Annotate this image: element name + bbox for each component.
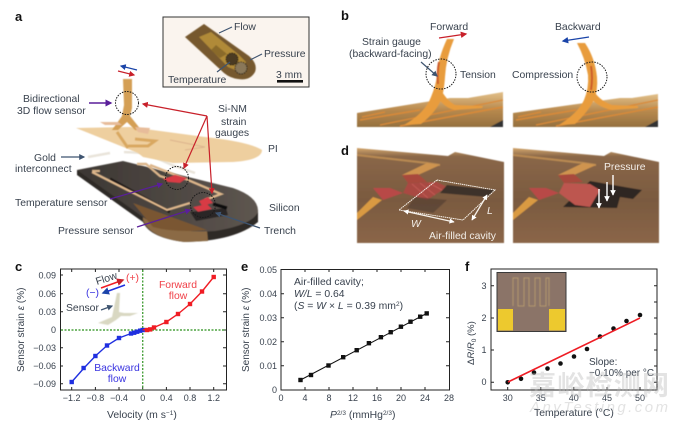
axes frame and ticks bbox=[281, 269, 450, 390]
backward label and arrow bbox=[555, 22, 601, 41]
pressure label and arrows: Pressure bbox=[604, 162, 646, 173]
strain gauge label bbox=[349, 37, 437, 76]
x tick labels: 40 bbox=[569, 393, 579, 403]
backward photo bbox=[513, 43, 658, 127]
panel label e: e bbox=[241, 259, 248, 274]
watermark: AnyTesting.com bbox=[529, 399, 668, 416]
label: silicon: Silicon bbox=[269, 203, 300, 214]
x tick labels: 0 bbox=[278, 393, 284, 403]
y tick labels: 0 bbox=[51, 325, 56, 335]
label: Si-NM strain gauges: Si-NM bbox=[218, 104, 247, 115]
y tick labels: 0.02 bbox=[259, 337, 277, 347]
silicon base bbox=[77, 161, 258, 242]
dashed circles bbox=[116, 92, 216, 218]
label: temperature sensor bbox=[15, 184, 162, 209]
label: pressure sensor bbox=[58, 210, 190, 237]
x tick labels: 12 bbox=[348, 393, 358, 403]
y tick labels: 0.04 bbox=[259, 289, 277, 299]
inset labels: Flow bbox=[234, 22, 256, 33]
faint gold layer bbox=[88, 152, 195, 173]
W L cavity labels bbox=[411, 206, 497, 242]
y tick labels: 0.03 bbox=[38, 307, 56, 317]
pink strain gauges bbox=[163, 175, 213, 212]
axis titles: 2/3 bbox=[383, 410, 392, 417]
label: trench bbox=[216, 213, 296, 237]
label: Si-NM strain gauges: gauges bbox=[215, 128, 249, 139]
inset labels bbox=[168, 22, 306, 86]
x tick labels bbox=[278, 393, 454, 403]
y tick labels bbox=[259, 265, 277, 395]
pressure label and arrows bbox=[599, 162, 646, 208]
axis titles bbox=[241, 288, 395, 421]
black data points bbox=[505, 313, 642, 385]
x tick labels: 4 bbox=[302, 393, 308, 403]
axis titles bbox=[16, 288, 177, 421]
x tick labels: −0.8 bbox=[87, 393, 104, 403]
y tick labels: −0.09 bbox=[33, 379, 56, 389]
backward label and arrow: Backward bbox=[555, 22, 601, 33]
annotation text: (S = W × L = 0.39 mm bbox=[294, 301, 396, 312]
backward flow label: Backward bbox=[94, 363, 140, 374]
x tick labels: 30 bbox=[503, 393, 513, 403]
x tick labels: 1.2 bbox=[207, 393, 220, 403]
label: PI: PI bbox=[268, 144, 278, 155]
forward flow label: Forward bbox=[159, 280, 197, 291]
x tick labels bbox=[63, 393, 220, 403]
panel: b forward and backward bending bbox=[341, 8, 658, 127]
axis titles: 2/3 bbox=[337, 410, 346, 417]
x tick labels: 16 bbox=[372, 393, 382, 403]
annotation text: W/L = 0.64 bbox=[294, 289, 345, 300]
forward label and arrow: Forward bbox=[430, 22, 468, 33]
x tick labels: 28 bbox=[444, 393, 454, 403]
label: gold interconnect: Gold bbox=[34, 153, 56, 164]
flow legend inset: Flow bbox=[95, 270, 119, 288]
y tick labels bbox=[481, 281, 487, 387]
x tick labels bbox=[503, 393, 645, 403]
device photo bbox=[185, 24, 256, 79]
label: temperature sensor: Temperature sensor bbox=[15, 198, 108, 209]
annotation text: Air-filled cavity; bbox=[294, 277, 364, 288]
PI layer bbox=[76, 127, 262, 163]
tension circle and label bbox=[426, 59, 496, 89]
y tick labels: −0.06 bbox=[33, 361, 56, 371]
black data series bbox=[298, 311, 429, 382]
x tick labels: 0.8 bbox=[184, 393, 196, 403]
x tick labels: 35 bbox=[536, 393, 546, 403]
panel label f: f bbox=[465, 259, 470, 274]
flow legend inset: Sensor bbox=[66, 303, 99, 314]
annotation text bbox=[294, 277, 403, 312]
W L cavity labels: L bbox=[487, 206, 493, 217]
blue backward data series bbox=[70, 328, 145, 384]
x tick labels: 0 bbox=[140, 393, 145, 403]
axis titles: P bbox=[330, 410, 337, 421]
annotation text: ) bbox=[400, 301, 403, 312]
forward flow label: flow bbox=[169, 291, 188, 302]
flow legend inset bbox=[66, 270, 139, 325]
axis titles: Temperature (°C) bbox=[534, 408, 614, 419]
axis titles: ) bbox=[173, 410, 177, 421]
x tick labels: −1.2 bbox=[63, 393, 81, 403]
axis titles bbox=[466, 321, 614, 419]
label: gold interconnect: interconnect bbox=[15, 164, 72, 175]
panel: e strain vs pressure chart bbox=[241, 259, 454, 421]
W L cavity labels: Air-filled cavity bbox=[429, 231, 497, 242]
strain gauge label: (backward-facing) bbox=[349, 49, 432, 60]
panel: d air-filled cavity bbox=[341, 143, 659, 243]
axis titles: 0 bbox=[471, 338, 478, 342]
x tick labels: −0.4 bbox=[110, 393, 128, 403]
y tick labels: −0.03 bbox=[33, 343, 56, 353]
red forward data series bbox=[143, 275, 216, 332]
left cavity photo bbox=[357, 148, 504, 243]
axis titles: (%) bbox=[466, 321, 477, 339]
panel: f resistance vs temperature chart bbox=[465, 259, 669, 419]
label: pressure sensor: Pressure sensor bbox=[58, 226, 134, 237]
y tick labels bbox=[33, 270, 56, 389]
backward flow label: flow bbox=[108, 374, 127, 385]
inset photo of device bbox=[163, 17, 309, 87]
label: trench: Trench bbox=[264, 226, 296, 237]
x tick labels: 24 bbox=[420, 393, 430, 403]
compression circle and label bbox=[512, 62, 607, 92]
y tick labels: 0.01 bbox=[259, 361, 277, 371]
scale bar: 3 mm bbox=[276, 70, 302, 81]
x tick labels: 8 bbox=[326, 393, 332, 403]
panel label d: d bbox=[341, 143, 349, 158]
inset labels: Temperature bbox=[168, 75, 227, 86]
y tick labels: 0 bbox=[481, 377, 487, 387]
axis titles: Sensor strain ε (%) bbox=[16, 288, 27, 372]
axis titles: Sensor strain ε (%) bbox=[241, 288, 252, 372]
x tick labels: 50 bbox=[635, 393, 645, 403]
panel label b: b bbox=[341, 8, 349, 23]
axis titles: (mmHg bbox=[346, 410, 383, 421]
y tick labels: 0.03 bbox=[259, 313, 277, 323]
axes frame and ticks bbox=[491, 269, 657, 390]
W L cavity labels: W bbox=[411, 219, 422, 230]
panel label c: c bbox=[15, 259, 22, 274]
watermark bbox=[529, 371, 669, 416]
backward flow label bbox=[94, 363, 140, 385]
x tick labels: 0.4 bbox=[160, 393, 173, 403]
gold interconnect traces bbox=[92, 164, 221, 210]
panel label a: a bbox=[15, 9, 23, 24]
y tick labels: 3 bbox=[481, 281, 487, 291]
temperature sensor micrograph inset bbox=[497, 272, 566, 332]
label: gold interconnect bbox=[15, 153, 84, 175]
inset labels: Pressure bbox=[264, 49, 306, 60]
panel: c strain vs velocity chart bbox=[15, 259, 226, 421]
y tick labels: 0.05 bbox=[259, 265, 277, 275]
x tick labels: 45 bbox=[602, 393, 612, 403]
compression circle and label: Compression bbox=[512, 70, 573, 81]
bidirectional flow sensor strip bbox=[100, 79, 150, 134]
flow legend inset: (+) bbox=[126, 273, 139, 284]
axis titles: ) bbox=[392, 410, 395, 421]
red strain gauge pointers bbox=[143, 104, 212, 193]
forward photo bbox=[357, 39, 503, 127]
flow direction arrows a bbox=[118, 66, 137, 75]
sensor thumbnail bbox=[98, 293, 138, 325]
y tick labels: 0.09 bbox=[38, 270, 56, 280]
x tick labels: 20 bbox=[396, 393, 406, 403]
axis titles: ΔR/R bbox=[466, 342, 477, 365]
tension circle and label: Tension bbox=[460, 70, 496, 81]
label: bidirectional flow sensor: 3D flow sensor bbox=[17, 106, 86, 117]
annotation text: 2 bbox=[396, 301, 400, 308]
right cavity photo bbox=[513, 148, 659, 243]
axis titles: −1 bbox=[166, 410, 174, 417]
forward flow label bbox=[159, 280, 197, 302]
label: Si-NM strain gauges bbox=[215, 104, 249, 139]
slope annotation: −0.10% per °C bbox=[589, 368, 654, 379]
y tick labels: 2 bbox=[481, 313, 487, 323]
cavity outline and dimensions bbox=[399, 180, 495, 222]
axes frame and ticks bbox=[60, 269, 226, 390]
panel: a exploded device diagram bbox=[15, 9, 309, 242]
green zero lines bbox=[61, 270, 226, 390]
red fit line bbox=[508, 318, 640, 382]
axis titles: Velocity (m s bbox=[107, 410, 166, 421]
y tick labels: 0.06 bbox=[38, 289, 56, 299]
flow legend inset: (−) bbox=[86, 288, 99, 299]
label: Si-NM strain gauges: strain bbox=[221, 117, 247, 128]
forward label and arrow bbox=[430, 22, 468, 38]
y tick labels: 1 bbox=[481, 345, 487, 355]
strain gauge label: Strain gauge bbox=[362, 37, 421, 48]
slope annotation: Slope: bbox=[589, 357, 617, 368]
slope annotation bbox=[589, 357, 654, 379]
label: bidirectional flow sensor: Bidirectional bbox=[23, 94, 80, 105]
y tick labels: 0 bbox=[272, 385, 277, 395]
watermark: 嘉峪检测网 bbox=[529, 371, 669, 401]
label: bidirectional flow sensor bbox=[17, 94, 111, 117]
